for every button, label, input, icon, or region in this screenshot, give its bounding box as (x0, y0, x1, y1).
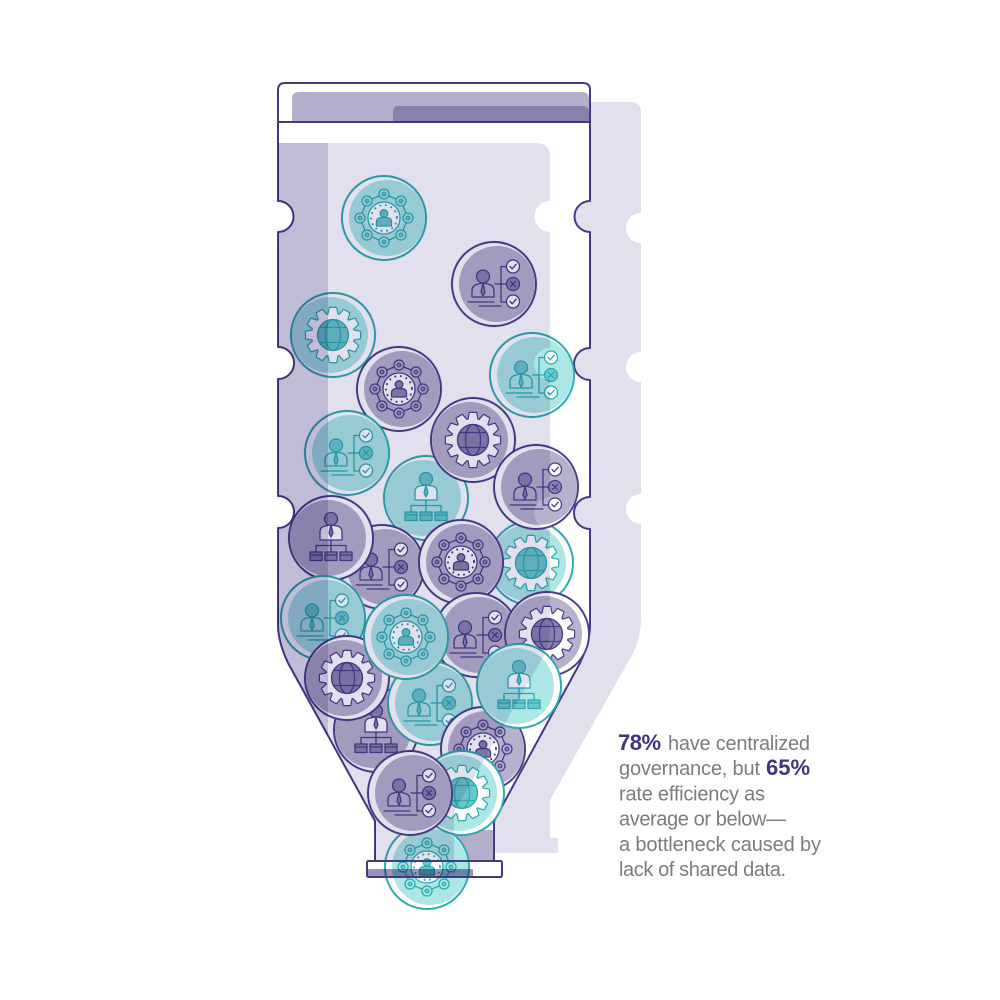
ball: teal decision (280, 574, 366, 662)
callout text: a bottleneck caused by (619, 834, 821, 856)
ball: teal network (340, 174, 428, 262)
ball: purple network (440, 706, 526, 792)
mouth shadow bar (367, 869, 473, 877)
ball: purple gear (430, 396, 516, 484)
callout text: average or below— (619, 808, 786, 830)
ball: purple network (418, 518, 504, 606)
ball: purple network (356, 346, 442, 432)
ball: purple gear (304, 634, 390, 722)
balls: icons falling through the bottle (280, 174, 590, 910)
bottle outline (278, 83, 590, 861)
ball: teal gear (488, 520, 574, 606)
bottle cap shading (278, 92, 590, 122)
ball: teal network (384, 824, 470, 910)
ball: teal org chart (476, 642, 562, 730)
ball: purple decision (366, 750, 454, 836)
bottle mouth fill (367, 861, 502, 877)
callout text: lack of shared data. (619, 859, 786, 881)
callout text: have centralized (668, 733, 810, 755)
ball: teal gear (418, 750, 506, 836)
offset shadow of the bottle (480, 102, 641, 853)
ball: teal decision (304, 410, 390, 496)
ball: purple gear (504, 590, 590, 678)
ball: purple decision (338, 524, 426, 610)
ball: purple decision (432, 592, 520, 678)
ball: teal decision (488, 332, 576, 418)
inner darker strip (278, 143, 328, 763)
bottle mouth outline (367, 861, 502, 877)
ball: purple org chart (332, 686, 420, 774)
inner lavender panel (278, 143, 550, 861)
ball: teal decision (386, 660, 474, 746)
callout text: 65% (766, 755, 810, 780)
ball: purple org chart (288, 494, 374, 582)
ball: purple decision (450, 240, 538, 328)
ball: teal gear (290, 292, 376, 378)
callout text: rate efficiency as (619, 784, 765, 806)
ball: teal org chart (382, 454, 470, 542)
callout text: 78% (618, 730, 661, 755)
ball: purple decision (492, 444, 580, 530)
callout text (618, 730, 821, 881)
ball: teal network (362, 594, 450, 680)
callout text: governance, but (619, 758, 760, 780)
neck shading (454, 830, 493, 861)
